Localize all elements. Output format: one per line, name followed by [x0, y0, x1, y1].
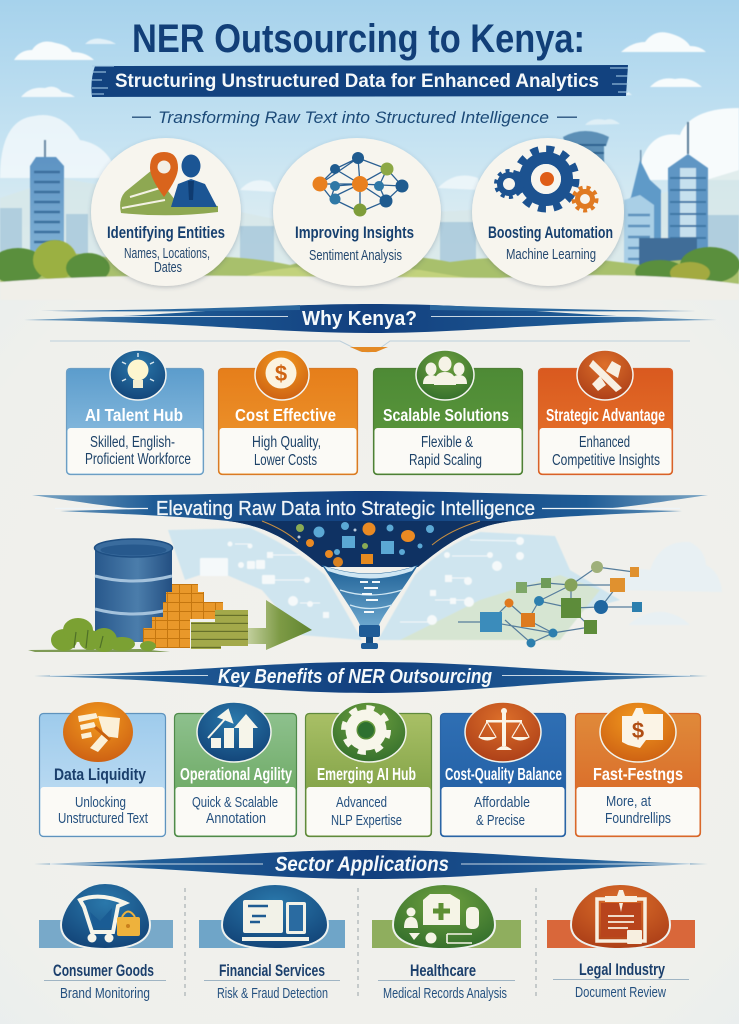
section banner: key benefits [34, 662, 708, 693]
illustration: clouds [0, 32, 739, 192]
icon: clipboard [571, 884, 670, 949]
description: More, at [606, 793, 652, 810]
heading: Elevating Raw Data into Strategic Intelligence [156, 498, 535, 520]
panel: boosting automation [472, 138, 624, 286]
heading: Data Liquidity [54, 765, 146, 784]
description: Proficient Workforce [85, 451, 191, 468]
description: Foundrellips [605, 810, 671, 827]
heading: Legal Industry [579, 960, 665, 979]
section banner: elevating raw data [32, 491, 708, 567]
illustration: city skyline [0, 122, 739, 270]
icon: shopping cart [61, 883, 150, 949]
description [85, 434, 191, 468]
description: Names, Locations, [124, 246, 210, 262]
description: Document Review [575, 984, 666, 1001]
icon: hospital and people [393, 884, 495, 949]
description: NLP Expertise [331, 812, 402, 829]
panel: healthcare [372, 884, 521, 1002]
building: right tower [668, 122, 708, 262]
background: lower paper [0, 275, 739, 1024]
building: left tower [30, 140, 64, 252]
description [58, 794, 149, 827]
icon: data funnel [322, 565, 418, 649]
panel: financial services [199, 884, 345, 1002]
description [124, 246, 210, 276]
description: Unlocking [75, 794, 126, 811]
panel: operational agility [174, 702, 297, 837]
description: & Precise [476, 812, 525, 829]
heading: Emerging AI Hub [317, 764, 416, 784]
panel: consumer goods [39, 883, 173, 1002]
icon: rising bars [197, 702, 271, 762]
description [605, 793, 671, 827]
icon: gears [496, 149, 596, 210]
heading: Scalable Solutions [383, 405, 509, 425]
heading: Healthcare [410, 961, 476, 980]
building: low block [639, 238, 697, 268]
divider [357, 888, 359, 1000]
illustration: oil barrel [94, 539, 172, 642]
description [252, 434, 321, 469]
heading: Financial Services [219, 961, 325, 980]
icon: scales [465, 702, 541, 762]
subtitle banner: Structuring Unstructured Data for Enhanced Analytics [115, 71, 599, 92]
illustration: data particles [262, 521, 480, 567]
illustration: faded data field [168, 528, 620, 640]
divider [535, 888, 537, 1000]
description: Annotation [206, 810, 266, 827]
panel: data liquidity [39, 702, 166, 837]
panel: strategic advantage [538, 350, 673, 475]
panel: cost-quality balance [440, 702, 566, 837]
icon: neural network [312, 152, 408, 216]
icon: documents and hand [63, 702, 133, 762]
illustration: hills and trees [0, 240, 739, 300]
heading: Consumer Goods [53, 961, 154, 980]
heading: Improving Insights [295, 223, 414, 242]
description: Machine Learning [506, 247, 596, 263]
icon: map pin and person [120, 152, 218, 215]
description: Risk & Fraud Detection [217, 985, 328, 1002]
panel: legal industry [547, 884, 695, 1001]
description: Rapid Scaling [409, 452, 482, 469]
arrow [248, 600, 312, 650]
icon: dollar note: $ [632, 718, 644, 743]
description: Sentiment Analysis [309, 248, 402, 264]
panel: emerging AI hub [305, 702, 432, 837]
heading: Why Kenya? [302, 308, 417, 330]
description [474, 794, 530, 829]
icon: light bulb [110, 350, 166, 400]
description [552, 434, 660, 469]
illustration: green coin stacks [191, 610, 248, 649]
building: round tower [563, 131, 609, 165]
description: Enhanced [579, 434, 630, 451]
heading: Key Benefits of NER Outsourcing [218, 666, 492, 688]
description: Skilled, English- [90, 434, 175, 451]
illustration: gold bricks [143, 584, 223, 648]
heading: Boosting Automation [488, 223, 613, 242]
icon: computer and tablet [222, 884, 328, 949]
description: Competitive Insights [552, 452, 660, 469]
panel: scalable solutions [373, 350, 523, 475]
description: Unstructured Text [58, 810, 149, 827]
icon: dollar coin: $ [275, 361, 287, 386]
icon: gear [332, 702, 406, 762]
panel: fast-festngs [575, 702, 701, 837]
description: Advanced [336, 794, 387, 811]
illustration: right clouds [610, 542, 722, 625]
panel: identifying entities [91, 138, 241, 286]
heading: Fast-Festngs [593, 764, 683, 784]
description: Dates [154, 260, 182, 276]
icon: team [416, 350, 474, 400]
section banner: why kenya [24, 304, 717, 333]
description: Medical Records Analysis [383, 985, 507, 1002]
panel: cost effective [218, 350, 358, 475]
title: NER Outsourcing to Kenya: [132, 17, 585, 61]
illustration: bushes [28, 618, 170, 652]
heading: Operational Agility [180, 764, 292, 784]
pointer [50, 341, 690, 352]
heading: Cost Effective [235, 405, 336, 425]
description: Affordable [474, 794, 530, 811]
description [331, 794, 402, 829]
illustration: structured data network [458, 561, 642, 648]
section banner: sector applications [34, 850, 708, 879]
description: Quick & Scalable [192, 794, 278, 811]
divider [184, 888, 186, 1000]
heading: AI Talent Hub [85, 405, 183, 425]
heading: Identifying Entities [107, 223, 225, 242]
icon: crossed tools [577, 350, 633, 400]
panel: AI talent hub [66, 350, 204, 475]
description [409, 434, 482, 469]
description: Brand Monitoring [60, 985, 150, 1002]
subtitle banner [91, 65, 628, 97]
heading: Cost-Quality Balance [445, 764, 562, 784]
tagline: Transforming Raw Text into Structured Intelligence [158, 108, 549, 127]
description [192, 794, 278, 827]
building: center-right tower [624, 150, 661, 270]
description: Lower Costs [254, 452, 317, 469]
description: Flexible & [421, 434, 473, 451]
panel: improving insights [273, 138, 441, 286]
description: High Quality, [252, 434, 321, 451]
heading: Strategic Advantage [546, 405, 665, 425]
heading: Sector Applications [275, 853, 449, 876]
background: sky [0, 0, 739, 290]
